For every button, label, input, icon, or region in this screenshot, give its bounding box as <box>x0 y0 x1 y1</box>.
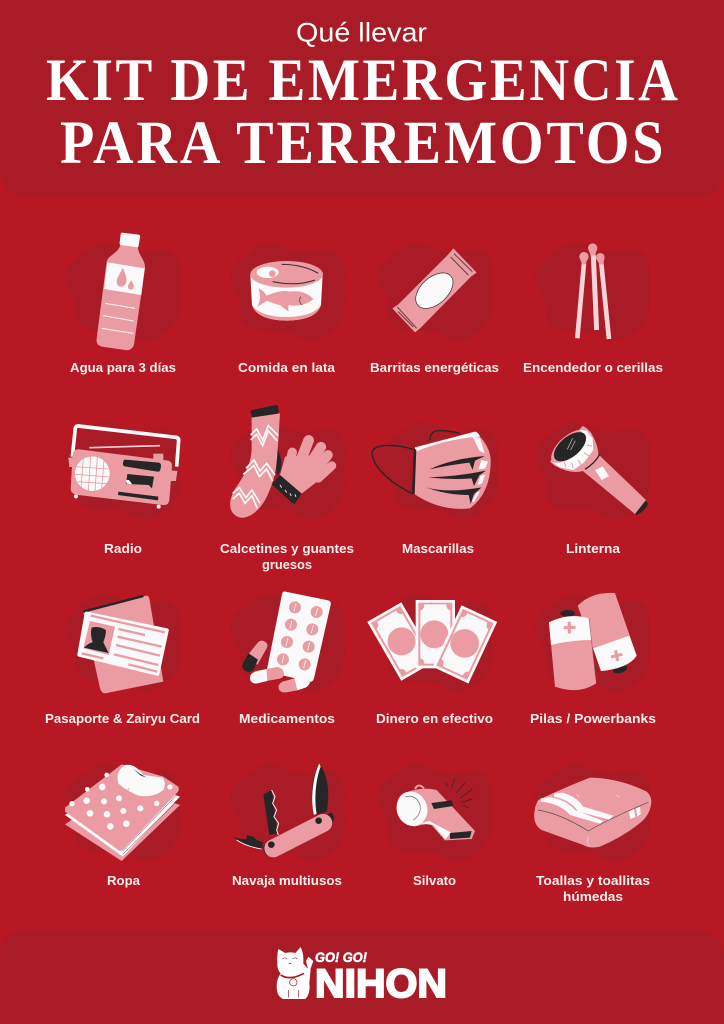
item: navaja <box>230 763 345 888</box>
label <box>536 873 650 904</box>
blob <box>535 594 650 691</box>
footer band <box>0 930 724 1024</box>
icon: multi-tool knife <box>233 763 335 860</box>
icon: folded clothes <box>65 764 180 861</box>
icon: flashlight <box>544 422 648 515</box>
item: comida <box>230 243 345 375</box>
label: Navaja multiusos <box>232 873 342 888</box>
item: pilas <box>530 593 656 726</box>
label: Pilas / Powerbanks <box>530 711 656 726</box>
icon: sock and glove <box>230 405 332 518</box>
header band <box>0 0 724 196</box>
icon: face mask <box>372 431 491 509</box>
blob <box>230 764 345 861</box>
blob <box>230 594 345 691</box>
header <box>0 0 724 196</box>
label: Radio <box>104 541 142 556</box>
label: Encendedor o cerillas <box>523 360 663 375</box>
footer <box>0 930 724 1024</box>
blob <box>230 422 345 519</box>
blob <box>377 243 492 340</box>
blob <box>65 422 180 519</box>
blob <box>65 243 180 340</box>
item: dinero <box>367 594 497 726</box>
subtitle: Qué llevar <box>296 18 427 48</box>
icon: pills <box>242 592 331 692</box>
label: Pasaporte & Zairyu Card <box>45 711 200 726</box>
item: silvato <box>377 764 492 888</box>
item: linterna <box>535 422 650 556</box>
icon: water bottle <box>97 233 145 350</box>
icon: passport and ID card <box>77 596 169 693</box>
label: Medicamentos <box>239 711 335 726</box>
label: Comida en lata <box>238 360 336 375</box>
icon: matches <box>577 243 609 339</box>
label: Mascarillas <box>402 541 474 556</box>
blob <box>230 243 345 340</box>
item: agua <box>65 233 180 375</box>
title line 1: KIT DE EMERGENCIA <box>46 48 678 114</box>
icon: towel <box>534 778 651 848</box>
blob <box>377 764 492 861</box>
label: Silvato <box>413 873 456 888</box>
label: Linterna <box>566 541 621 556</box>
blob <box>65 594 180 691</box>
icon: tin can <box>250 261 323 321</box>
item: pasaporte <box>45 594 200 726</box>
label line 1: Toallas y toallitas <box>536 873 650 888</box>
logo: NIHON: NIHON <box>315 962 447 1006</box>
blob <box>535 764 650 861</box>
item: calcetines <box>220 405 354 572</box>
label line 2: gruesos <box>262 557 312 572</box>
item: mascarillas <box>372 422 498 556</box>
icon: batteries <box>549 593 637 690</box>
blob <box>535 243 650 340</box>
label <box>220 541 354 572</box>
item: medicamentos <box>230 592 345 726</box>
label: Ropa <box>107 873 141 888</box>
blob <box>383 422 498 519</box>
label: Barritas energéticas <box>370 360 499 375</box>
blob <box>535 422 650 519</box>
logo: GO! GO!: GO! GO! <box>315 950 367 965</box>
label line 1: Calcetines y guantes <box>220 541 354 556</box>
item: radio <box>65 422 180 556</box>
blob <box>377 594 492 691</box>
label line 2: húmedas <box>563 889 623 904</box>
item: encendedor <box>523 243 663 375</box>
logo: maneki-neko cat <box>277 947 313 999</box>
item: ropa <box>65 764 180 888</box>
item: toallas <box>534 764 651 904</box>
icon: radio <box>68 426 179 509</box>
blob <box>65 764 180 861</box>
item: barritas <box>370 243 499 375</box>
label: Dinero en efectivo <box>376 711 493 726</box>
icon: banknotes <box>367 600 497 683</box>
icon: energy bar <box>392 248 477 332</box>
label: Agua para 3 días <box>70 360 176 375</box>
title line 2: PARA TERREMOTOS <box>60 109 664 177</box>
icon: whistle <box>397 778 475 840</box>
